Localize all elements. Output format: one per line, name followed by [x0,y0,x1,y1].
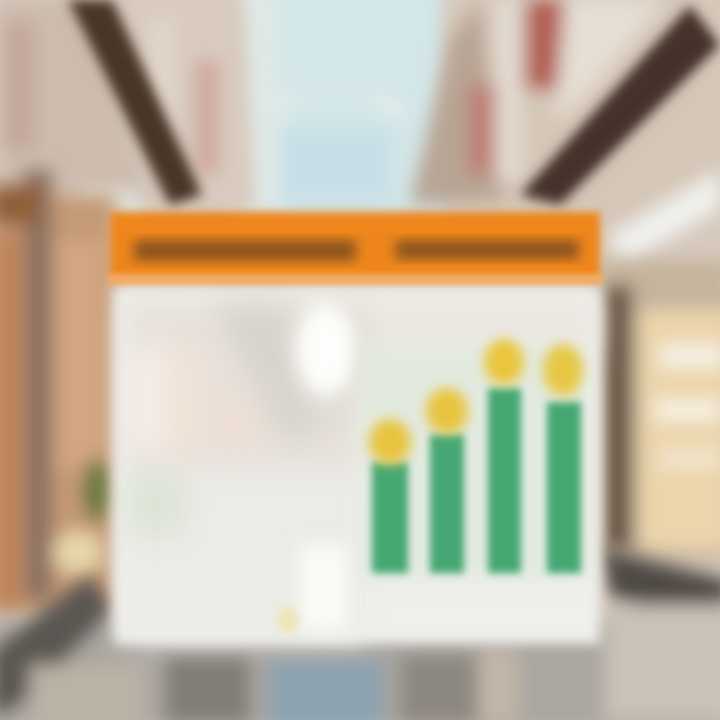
bar 2 [426,388,468,573]
bar halo [362,345,590,580]
small yellow spot [277,606,299,634]
left wall upper [0,0,255,220]
panel: chart card [114,288,600,644]
left wall lower [0,170,115,615]
skylight [240,0,445,215]
right wall upper [410,0,720,268]
right wall lower [600,260,720,560]
banner lower glow [108,274,602,284]
bar 1 [369,419,411,573]
heading smudge: right [395,240,579,259]
bar 3 [484,339,524,573]
heading smudge: left [134,240,356,261]
bar chart [362,339,590,580]
panel skylight glow [296,304,356,396]
dark beam left [68,0,202,205]
bar 4 [543,344,583,573]
banner: orange header [108,212,602,284]
floor [0,548,720,720]
panel floor glow [300,545,348,630]
panel photo reflection [125,300,595,640]
dark beam right [520,5,720,205]
